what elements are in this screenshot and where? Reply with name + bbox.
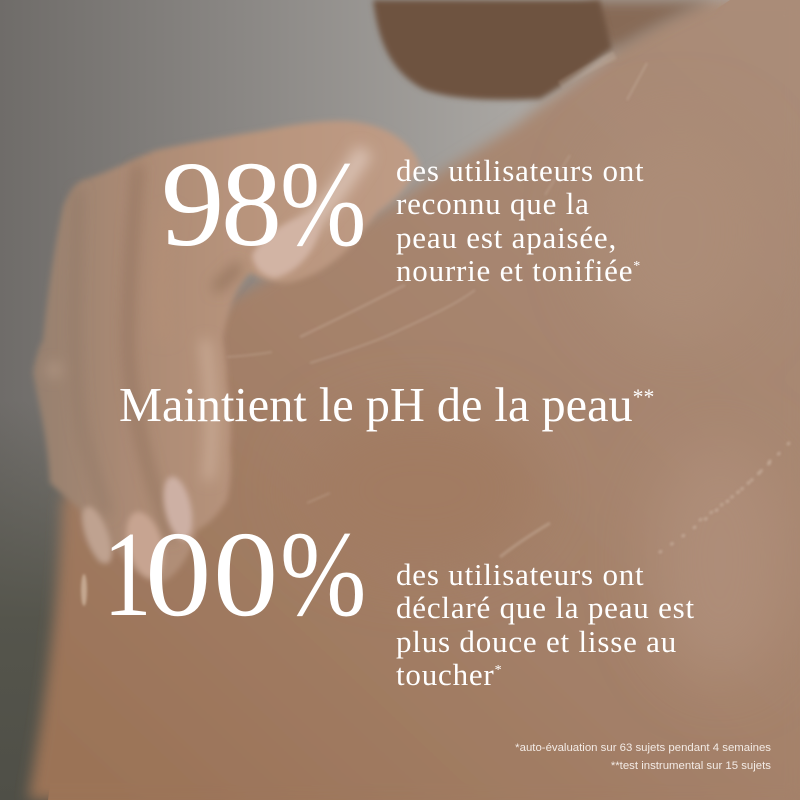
stat: 100%: % xyxy=(280,507,366,642)
footnotes: **test instrumental sur 15 sujets xyxy=(611,760,771,772)
neck and chin xyxy=(373,0,715,100)
description: 100%: des utilisateurs ont déclaré que la peau est plus douce et lisse au toucher* xyxy=(396,557,695,692)
footnotes: *auto-évaluation sur 63 sujets pendant 4 semaines xyxy=(515,742,771,754)
skin tone variations xyxy=(300,120,790,680)
description: 98%: des utilisateurs ont reconnu que la peau est apaisée, nourrie et tonifiée* xyxy=(396,153,644,288)
dark wall lower left xyxy=(0,400,90,800)
stat: 98% xyxy=(161,137,366,272)
stat: 98%: 8 xyxy=(221,137,282,272)
finger shading and highlights xyxy=(48,150,365,540)
footnotes xyxy=(515,742,771,772)
hand xyxy=(33,121,420,583)
thumb tip and fingernails xyxy=(76,212,320,606)
stat: 100%: 0 xyxy=(145,507,211,642)
stat: 98%: % xyxy=(280,137,366,272)
stat: 98%: 9 xyxy=(161,137,224,272)
stat: 100%: 0 xyxy=(213,507,278,642)
stat: 100% xyxy=(103,507,366,642)
cream streaks xyxy=(227,55,790,557)
heading: pH: Maintient le pH de la peau** xyxy=(119,379,654,432)
stat: 100%: 1 xyxy=(103,507,152,642)
